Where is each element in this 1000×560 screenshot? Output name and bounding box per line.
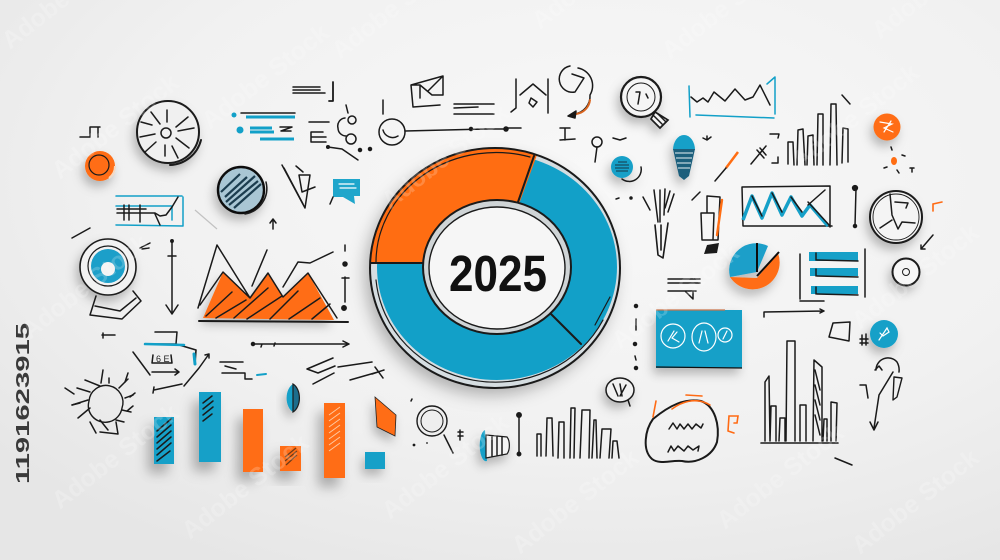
icon: sheets bbox=[692, 192, 722, 254]
watermark pattern: Adobe Stock bbox=[786, 59, 924, 175]
watermark pattern: Adobe Stock bbox=[711, 419, 849, 535]
bar 2 hatch bbox=[203, 396, 213, 421]
framed zigzag chart bbox=[742, 186, 832, 227]
icon: sun sketch bbox=[65, 370, 135, 434]
bar chart bbox=[154, 392, 345, 478]
down arrow bbox=[166, 240, 178, 314]
top center: envelope sketch bbox=[411, 76, 443, 107]
scribble lines bbox=[307, 358, 384, 384]
vertical pin center bbox=[517, 413, 521, 456]
top small arrow lines bbox=[293, 82, 333, 101]
vertical pin bbox=[853, 186, 857, 228]
watermark pattern: Adobe Stock bbox=[376, 99, 514, 215]
watermark pattern: Adobe Stock bbox=[176, 429, 314, 545]
small square sketch bbox=[829, 322, 850, 341]
donut chart bbox=[370, 148, 620, 388]
bottom left small mark bbox=[102, 333, 115, 338]
watermark pattern: Adobe Stock bbox=[846, 444, 984, 560]
bar 4 bbox=[280, 446, 301, 471]
donut: orange segment bbox=[371, 148, 537, 263]
small tick mark bbox=[140, 243, 150, 249]
icon: scribbled ball bbox=[218, 167, 267, 214]
small label in sketch: 6 E bbox=[156, 354, 170, 364]
lollipop line bbox=[379, 100, 521, 145]
spark marks with orange dot bbox=[884, 147, 914, 173]
line chart frame bbox=[116, 196, 183, 226]
watermark pattern: Adobe Stock bbox=[196, 19, 334, 135]
pie chart bbox=[729, 243, 780, 289]
sketch arrow shape bbox=[282, 165, 315, 208]
curved arrow sketch bbox=[860, 358, 902, 430]
blue note panel bbox=[656, 310, 742, 368]
watermark pattern: Adobe Stock bbox=[606, 239, 744, 355]
dark feather mark bbox=[751, 146, 766, 164]
orange feather bbox=[715, 152, 738, 181]
icon: megaphone bbox=[480, 430, 509, 461]
icon: blue small ball bbox=[611, 156, 641, 181]
bar 1 hatch bbox=[157, 419, 171, 461]
icon: blue round note bbox=[870, 320, 898, 348]
process arrows sketch bbox=[133, 332, 209, 393]
mini marks bbox=[358, 128, 626, 162]
small bracket mark bbox=[80, 127, 100, 137]
donut: sketch outlines bbox=[370, 148, 620, 388]
dotted vertical marks bbox=[634, 304, 638, 370]
small arrow down-left bbox=[921, 235, 933, 249]
sketched coin icon above blob bbox=[606, 378, 634, 406]
bar 5 bbox=[324, 403, 345, 478]
small dots left of brush bbox=[616, 197, 632, 199]
speech bubble bbox=[330, 179, 360, 204]
icon: half leaf bbox=[287, 384, 299, 412]
year label: 2025 bbox=[449, 245, 547, 302]
bar 5 hatch bbox=[329, 407, 340, 451]
sketch bar chart large bbox=[761, 341, 852, 465]
line chart in frame bbox=[689, 77, 775, 118]
donut: base rim bbox=[370, 148, 620, 388]
orange corner mark bbox=[728, 416, 738, 433]
icon: orange badge bbox=[874, 114, 900, 140]
right arrow with dot bbox=[252, 341, 349, 347]
blue legend lines bbox=[232, 112, 295, 139]
bar 2 bbox=[199, 392, 221, 462]
donut: center hole bbox=[429, 207, 565, 329]
house chart sketch bbox=[511, 79, 548, 113]
text lines sketch bbox=[668, 279, 700, 299]
watermark pattern: Adobe Stock bbox=[376, 409, 514, 525]
small tick bbox=[703, 136, 711, 140]
orange curl bbox=[933, 202, 942, 211]
donut: blue ring bbox=[377, 154, 617, 380]
bar 3 bbox=[243, 409, 263, 472]
top center lines bbox=[454, 104, 494, 114]
bar 4 hatch bbox=[285, 448, 297, 465]
small up arrow bbox=[270, 219, 276, 229]
small arrow right of panel bbox=[764, 309, 824, 317]
icon: blue bulb bbox=[673, 135, 695, 180]
icon: wheel bbox=[137, 101, 201, 165]
donut: hole rim bbox=[423, 200, 571, 334]
small gray arrow bbox=[195, 210, 217, 229]
small table sketch bbox=[220, 362, 266, 379]
watermark pattern: Adobe Stock bbox=[46, 399, 184, 515]
icon: magnifier bulb bbox=[621, 77, 668, 128]
icon: webcam bbox=[80, 239, 141, 319]
stock id vertical text: 1191623915 bbox=[13, 323, 33, 484]
icon: small dial bbox=[892, 258, 920, 286]
icon: magnifier bbox=[411, 399, 463, 453]
watermark pattern: Adobe Stock bbox=[846, 219, 984, 335]
watermark pattern: Adobe Stock bbox=[16, 229, 154, 345]
blue square bbox=[365, 452, 385, 469]
watermark pattern: Adobe Stock bbox=[46, 69, 184, 185]
icon: brush bbox=[643, 189, 674, 258]
flow sketch with circles bbox=[309, 105, 358, 160]
orange mountain chart bbox=[198, 245, 348, 322]
watermark pattern: Adobe Stock bbox=[506, 444, 644, 560]
bar 1 bbox=[154, 417, 174, 464]
sketch bar chart top right bbox=[770, 95, 850, 165]
icon: dial bbox=[870, 191, 922, 243]
looped arrow bbox=[559, 66, 593, 118]
horizontal bar list bbox=[800, 249, 865, 301]
sketch bar chart middle bbox=[537, 408, 619, 458]
orange flag bbox=[375, 397, 396, 436]
icon: thought blob bbox=[646, 395, 718, 462]
hash mark bbox=[860, 334, 868, 345]
dotted vertical mark bbox=[342, 245, 349, 310]
pen mark bbox=[72, 228, 90, 238]
icon: orange dot bbox=[85, 151, 115, 181]
